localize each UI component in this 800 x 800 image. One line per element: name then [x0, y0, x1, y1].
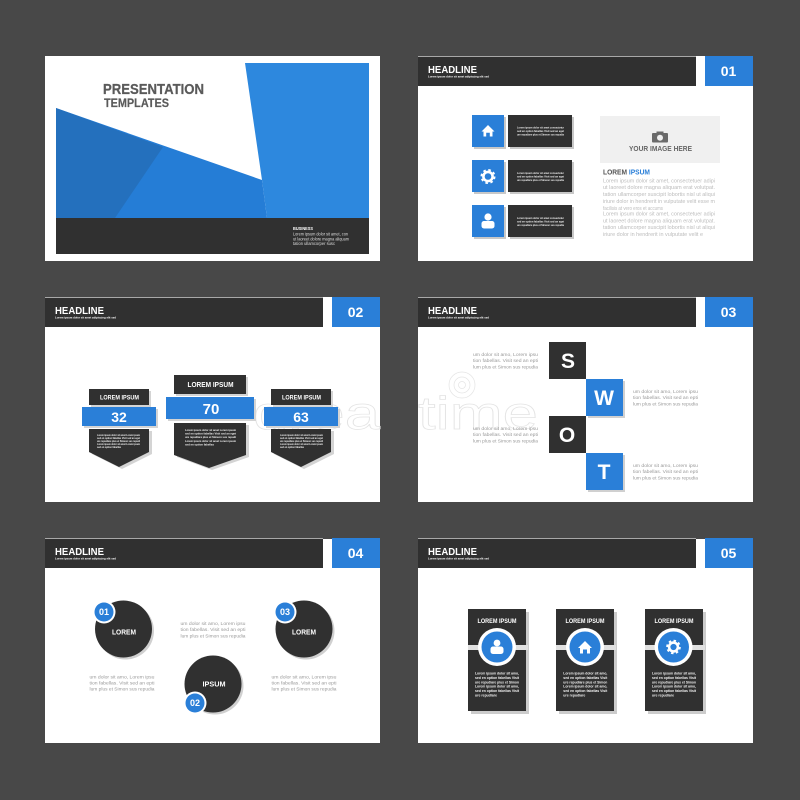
row: home: ure repudiare plus et Simeon sus repudia	[517, 132, 564, 136]
shield: 32	[82, 389, 158, 469]
shield: 70: sed en option fabellas Visit sed an eget	[185, 432, 236, 436]
text: left block	[90, 674, 155, 692]
body paragraph: iriure dolor in hendrerit in vulputate velit e	[603, 232, 703, 238]
row: person: Lorem ipsum dolor sit amet consectetur	[517, 216, 565, 220]
text: opportunities: tion fabellas. Visit sed an epti	[473, 432, 538, 437]
image placeholder: YOUR IMAGE HERE	[629, 144, 692, 153]
swot squares: O	[559, 424, 575, 447]
circle 03: LOREM	[292, 630, 316, 636]
cover right blue shape	[245, 63, 369, 218]
icon: person	[490, 640, 504, 654]
number tab 01	[705, 56, 753, 86]
circle 02: 02	[190, 698, 200, 708]
text: weaknesses: um dolor sit amo, Lorem ipsu	[633, 389, 698, 394]
cover footer text	[293, 226, 349, 246]
circle 03: 03	[280, 607, 290, 617]
shield: 32: 32	[111, 409, 127, 425]
text: strengths: um dolor sit amo, Lorem ipsu	[473, 352, 538, 357]
panel: cover slide	[45, 56, 380, 261]
shield: 32: LOREM IPSUM	[100, 394, 139, 402]
watermark: right part	[418, 372, 538, 439]
card: person	[468, 609, 529, 714]
circle 01: 01	[99, 607, 109, 617]
body paragraph: ut laoreet dolore magna aliquam erat volutpat.	[603, 185, 715, 191]
card: gear: ure repudiare	[652, 694, 674, 698]
card: home: ure repudiare plus et Simon	[563, 680, 607, 684]
panel: slide 02	[45, 297, 381, 502]
text: opportunities: lum plus et Simon sus repudia	[473, 438, 538, 443]
number tab 03: 03	[721, 304, 736, 320]
text: threats	[633, 463, 698, 480]
icon: gear	[667, 641, 680, 653]
watermark: left part: drea	[253, 387, 381, 439]
header bar 01: HEADLINE	[428, 65, 477, 76]
panel: slide 01	[418, 56, 753, 261]
watermark: right part: time	[418, 387, 538, 439]
card: home: sed en option fabellas Visit	[563, 689, 608, 693]
body paragraph: iriure dolor in hendrerit in vulputate velit esse m	[603, 199, 716, 205]
panel: slide 03 SWOT	[418, 297, 753, 502]
shield: 63: Lorem ipsum dolor sit amet Lorem ipsum	[280, 433, 323, 437]
number tab 02: 02	[348, 304, 363, 320]
cover dark blue shape	[56, 108, 163, 218]
text: right block: um dolor sit amo, Lorem ipsu	[272, 674, 337, 679]
text: center block: um dolor sit amo, Lorem ipsu	[180, 621, 246, 626]
circle 02: IPSUM	[202, 682, 226, 688]
shield: 63: LOREM IPSUM	[282, 394, 321, 402]
card: home: LOREM IPSUM	[566, 618, 604, 625]
shield: 63: ure repudiare plus et Simeon sus repudi	[280, 439, 323, 443]
text: strengths	[473, 352, 538, 369]
shield: 63: 63	[293, 409, 309, 425]
body paragraph: tation ullamcorper suscipit lobortis nisl ut aliqui	[603, 192, 715, 198]
body paragraph: facilisis at vero eros et accums	[603, 206, 663, 212]
card: home	[556, 609, 617, 714]
shield: 70: ure repudiare plus et Simeon sus repudi	[185, 435, 236, 439]
circle 01	[92, 600, 154, 660]
card: person: ure repudiare plus et Simon	[475, 680, 519, 684]
header bar 05	[418, 538, 696, 568]
row: gear: Lorem ipsum dolor sit amet consectetur	[517, 171, 565, 175]
card: gear: Lorem ipsum dolor sit amo,	[652, 672, 696, 676]
cover lower blue shape	[56, 108, 267, 218]
shield: 70	[166, 375, 256, 470]
card: gear	[645, 609, 706, 714]
number tab 02	[332, 297, 380, 327]
text: left block: lum plus et Simon sus repudia	[90, 687, 155, 692]
shield: 70: sed en option fabellas	[185, 442, 214, 446]
card: person: LOREM IPSUM	[478, 618, 516, 625]
shield: 32: Lorem ipsum dolor sit amet Lorem ipsum	[97, 433, 140, 437]
shield: 70: LOREM IPSUM	[188, 380, 234, 389]
row: gear	[472, 160, 574, 194]
text: left block: um dolor sit amo, Lorem ipsu	[90, 674, 155, 679]
header bar 03: Lorem ipsum dolor sit amet adipiscing elit sed	[428, 316, 489, 320]
circle 01: LOREM	[112, 630, 136, 636]
text: center block: lum plus et Simon sus repudia	[180, 633, 246, 638]
card: gear: ure repudiare plus et Simon	[652, 680, 696, 684]
card: gear: Lorem ipsum dolor sit amo,	[652, 685, 696, 689]
row: person	[472, 205, 574, 239]
cover footer text: ut laoreet dolore magna aliquam	[293, 236, 349, 241]
text: threats: um dolor sit amo, Lorem ipsu	[633, 463, 698, 468]
card: person: ure repudiare	[475, 694, 497, 698]
card: home: ure repudiare	[563, 694, 585, 698]
cover subtitle: TEMPLATES	[104, 98, 169, 110]
card: home: sed en option fabellas Visit	[563, 676, 608, 680]
image placeholder	[600, 116, 720, 163]
card: person: Lorem ipsum dolor sit amo,	[475, 672, 519, 676]
text: strengths: lum plus et Simon sus repudia	[473, 364, 538, 369]
circle 02	[184, 656, 244, 714]
text: strengths: tion fabellas. Visit sed an epti	[473, 358, 538, 363]
header bar 02	[45, 297, 323, 327]
number tab 05: 05	[721, 545, 736, 561]
shield: 32: Lorem ipsum dolor sit amet Lorem ipsum	[97, 442, 140, 446]
shield: 70: 70	[203, 401, 219, 418]
icon: home	[578, 641, 592, 654]
cover title: PRESENTATION	[103, 82, 204, 98]
text: center block: tion fabellas. Visit sed an epti	[180, 627, 246, 632]
shield: 32: ure repudiare plus et Simeon sus repudi	[97, 439, 140, 443]
panel: slide 05	[418, 538, 753, 743]
shield: 32: sed en option fabellas Visit sed an eget	[97, 436, 140, 440]
header bar 03	[418, 297, 696, 327]
text: opportunities	[473, 426, 538, 443]
shield: 32: sed en option fabellas	[97, 445, 121, 449]
body paragraph: tation ullamcorper suscipit lobortis nisl ut aliqui	[603, 225, 715, 231]
header bar 01: Lorem ipsum dolor sit amet adipiscing elit sed	[428, 74, 489, 78]
header bar 05: HEADLINE	[428, 547, 477, 558]
number tab 05	[705, 538, 753, 568]
row: home: Lorem ipsum dolor sit amet consectetur	[517, 126, 565, 130]
icon: person	[482, 213, 494, 228]
text: weaknesses: tion fabellas. Visit sed an epti	[633, 395, 698, 400]
header bar 04: HEADLINE	[55, 547, 104, 558]
text: weaknesses: lum plus et Simon sus repudia	[633, 401, 698, 406]
circle 03	[274, 600, 334, 660]
header bar 01	[418, 56, 696, 86]
icon: gear	[481, 170, 495, 183]
text: threats: lum plus et Simon sus repudia	[633, 475, 698, 480]
cover footer text: tation ullamcorper susc	[293, 241, 335, 246]
header bar 02: Lorem ipsum dolor sit amet adipiscing elit sed	[55, 316, 116, 320]
body paragraph	[603, 179, 716, 238]
icon: camera	[652, 132, 668, 142]
cover footer text: Lorem ipsum dolor sit amet, con	[293, 232, 349, 236]
card: person: Lorem ipsum dolor sit amo,	[475, 685, 519, 689]
shield: 63: Lorem ipsum dolor sit amet Lorem ipsum	[280, 442, 323, 446]
text: threats: tion fabellas. Visit sed an epti	[633, 469, 698, 474]
body paragraph: Lorem ipsum dolor sit amet, consectetuer adipi	[603, 212, 715, 218]
card: gear: sed en option fabellas Visit	[652, 689, 697, 693]
header bar 04	[45, 538, 323, 568]
cover dark footer bar	[56, 218, 369, 254]
row: home	[472, 115, 574, 149]
header bar 04: Lorem ipsum dolor sit amet adipiscing elit sed	[55, 556, 116, 560]
number tab 04	[332, 538, 380, 568]
text: opportunities: um dolor sit amo, Lorem ipsu	[473, 426, 538, 431]
text: left block: tion fabellas. Visit sed an epti	[90, 680, 154, 685]
text: center block	[180, 621, 246, 638]
header bar 02: HEADLINE	[55, 306, 104, 317]
swot squares: W	[594, 387, 614, 410]
body paragraph: Lorem ipsum dolor sit amet, consectetuer adipi	[603, 179, 715, 185]
text: right block	[272, 674, 337, 692]
card: gear: sed en option fabellas Visit	[652, 676, 697, 680]
icon: home	[482, 125, 494, 136]
panel: slide 04	[45, 538, 380, 743]
number tab 04: 04	[348, 545, 363, 561]
row: home: sed en option fabellas Visit sed an eget	[517, 129, 564, 133]
card: home: Lorem ipsum dolor sit amo,	[563, 685, 607, 689]
row: person: ure repudiare plus et Simeon sus repudia	[517, 223, 564, 227]
swot squares: S	[561, 350, 575, 373]
row: person: sed en option fabellas Visit sed an eget	[517, 220, 564, 224]
body heading: LOREM IPSUM	[603, 168, 650, 176]
card: person: sed en option fabellas Visit	[475, 676, 520, 680]
body paragraph: ut laoreet dolore magna aliquam erat volutpat.	[603, 218, 715, 224]
card: gear: LOREM IPSUM	[654, 618, 694, 625]
shield: 63	[264, 389, 340, 469]
row: gear: ure repudiare plus et Simeon sus repudia	[517, 178, 564, 182]
shield: 63: sed en option fabellas Visit sed an eget	[280, 436, 323, 440]
row: gear: sed en option fabellas Visit sed an eget	[517, 175, 564, 179]
header bar 05: Lorem ipsum dolor sit amet adipiscing elit sed	[428, 556, 489, 560]
card: person: sed en option fabellas Visit	[475, 689, 520, 693]
cover footer text: BUSINESS	[293, 226, 313, 231]
text: right block: tion fabellas. Visit sed an epti	[272, 680, 336, 685]
shield: 70: Lorem ipsum dolor sit amet Lorem ipsum	[185, 428, 236, 432]
swot squares: T	[598, 461, 611, 484]
card: home: Lorem ipsum dolor sit amo,	[563, 672, 607, 676]
number tab 03	[705, 297, 753, 327]
number tab 01: 01	[721, 63, 736, 79]
swot squares	[549, 342, 625, 492]
shield: 63: sed en option fabellas	[280, 445, 304, 449]
text: weaknesses	[633, 389, 698, 406]
text: right block: lum plus et Simon sus repudia	[272, 687, 337, 692]
shield: 70: Lorem ipsum dolor sit amet Lorem ipsum	[185, 439, 236, 443]
header bar 03: HEADLINE	[428, 306, 477, 317]
